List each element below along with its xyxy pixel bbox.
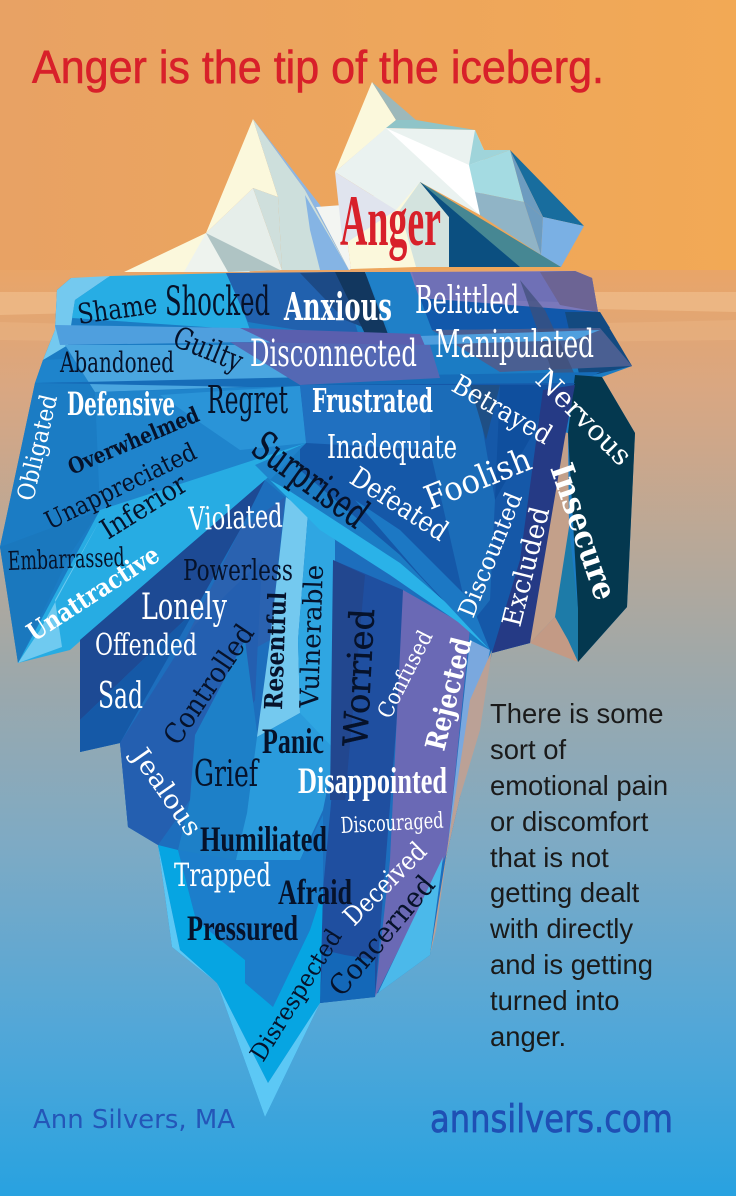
word: Afraid: [278, 872, 352, 912]
word: Lonely: [141, 587, 227, 628]
word: Worried: [336, 608, 383, 747]
word: Disappointed: [298, 761, 447, 802]
word: Concerned: [322, 869, 442, 1002]
tan facet: [530, 617, 578, 662]
author credit: Ann Silvers, MA: [33, 1105, 235, 1135]
word: Confused: [373, 627, 438, 723]
word: Violated: [187, 497, 283, 538]
word: Frustrated: [312, 381, 433, 420]
word: Nervous: [529, 363, 639, 472]
word: Rejected: [419, 634, 479, 754]
word: Abandoned: [59, 346, 174, 379]
explanatory text: turned into: [490, 985, 619, 1016]
word: Panic: [262, 721, 324, 761]
teal strip: [555, 527, 578, 662]
word: Defensive: [67, 385, 175, 423]
word: Guilty: [168, 320, 248, 379]
word: Unattractive: [21, 540, 165, 647]
explanatory text: anger.: [490, 1021, 566, 1052]
word: Excluded: [497, 504, 556, 630]
website: annsilvers.com: [430, 1097, 673, 1141]
top slab facets: [43, 276, 110, 360]
word: Powerless: [183, 553, 293, 587]
left panel facets: [0, 383, 120, 547]
word: Disconnected: [250, 332, 417, 375]
word: Defeated: [344, 460, 454, 548]
explanatory text: and is getting: [490, 949, 653, 980]
explanatory text: [489, 698, 668, 1052]
word: Trapped: [174, 856, 271, 894]
word: Surprised: [243, 423, 377, 538]
word: Disrespected: [244, 924, 348, 1066]
word: Deceived: [338, 836, 433, 932]
iceberg above water: [124, 82, 584, 272]
word: Overwhelmed: [64, 402, 203, 481]
tip bright interior: [158, 845, 323, 1083]
word: Embarrassed: [7, 543, 125, 577]
sky-blue left fan: [18, 443, 306, 663]
word: Inadequate: [327, 427, 457, 466]
word: Pressured: [187, 908, 298, 948]
explanatory text: with directly: [489, 913, 633, 944]
word: Discouraged: [340, 809, 444, 839]
title: Anger is the tip of the iceberg.: [32, 41, 604, 93]
word: Resentful: [259, 591, 292, 710]
explanatory text: There is some: [490, 698, 664, 729]
word: Humiliated: [200, 819, 327, 859]
word: Regret: [207, 378, 288, 422]
word: Grief: [194, 754, 260, 795]
sky-blue bottom right: [378, 857, 443, 993]
iceberg below water: [0, 271, 635, 1117]
right central panel: [300, 383, 575, 653]
explanatory text: or discomfort: [490, 806, 649, 837]
word: Inferior: [94, 467, 194, 546]
central light strip: [257, 497, 308, 737]
word: Anxious: [283, 284, 392, 329]
sky-blue diagonal strip: [270, 480, 490, 650]
word: Controlled: [156, 618, 261, 751]
word: Manipulated: [435, 322, 594, 366]
purple band: [375, 590, 470, 997]
word: Shame: [75, 287, 159, 331]
word: Foolish: [418, 439, 537, 517]
word: Unappreciated: [40, 437, 201, 535]
word: Offended: [95, 628, 197, 663]
word: Vulnerable: [295, 564, 330, 709]
explanatory text: getting dealt: [490, 877, 640, 908]
word: Shocked: [165, 279, 270, 325]
word: Jealous: [123, 740, 207, 842]
word: Betrayed: [446, 369, 557, 451]
word: Belittled: [415, 278, 519, 322]
navy vertical band: [320, 560, 403, 1003]
explanatory text: that is not: [490, 842, 609, 873]
navy right pillar: [568, 375, 635, 662]
explanatory text: sort of: [490, 734, 567, 765]
lower body base: [80, 480, 470, 1003]
word: Anger: Anger: [340, 181, 441, 261]
word: Insecure: [542, 458, 625, 605]
word: Discounted: [453, 488, 528, 621]
underwater silhouette: [0, 271, 635, 1117]
emotion words: [7, 278, 639, 1066]
word: Sad: [98, 676, 143, 717]
explanatory text: emotional pain: [490, 770, 668, 801]
word: Obligated: [12, 392, 63, 503]
tip rim: [158, 845, 320, 1117]
